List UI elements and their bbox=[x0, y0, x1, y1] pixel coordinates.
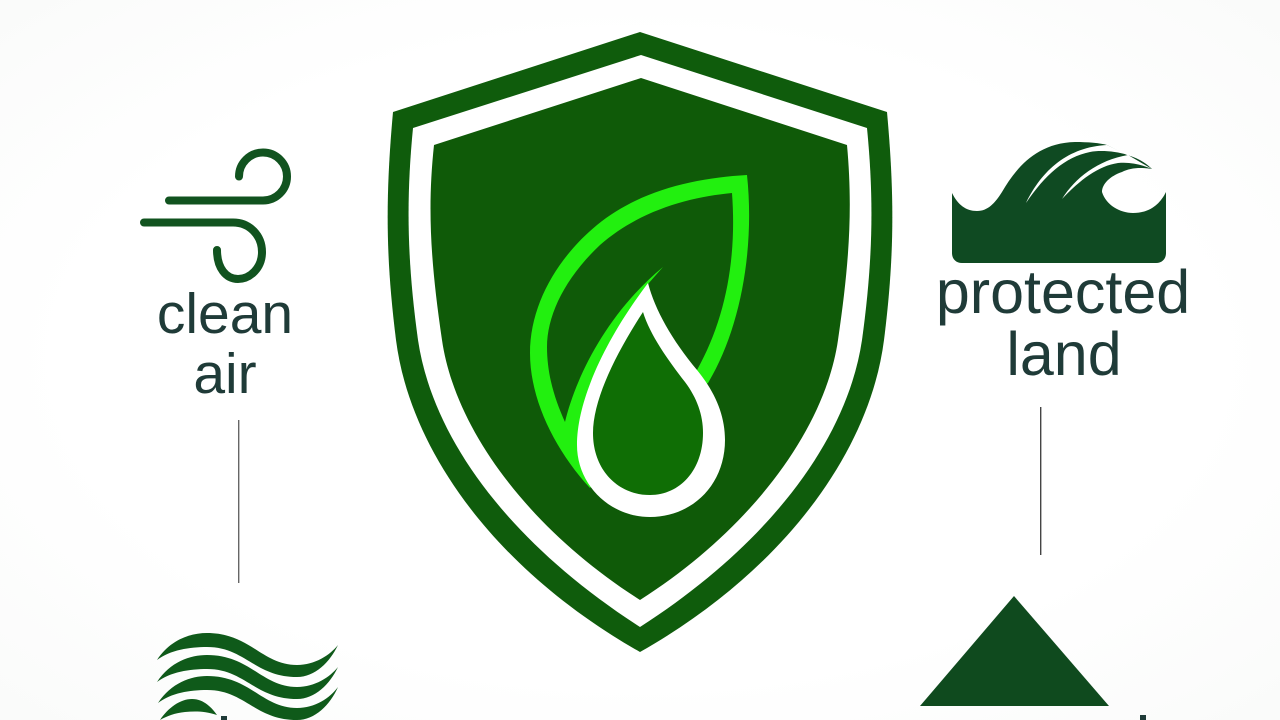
shield inner panel bbox=[431, 78, 850, 600]
label: protected land: protected bbox=[936, 258, 1190, 326]
clipped label top, left bbox=[221, 716, 227, 720]
icon: protected land wave bbox=[952, 142, 1166, 263]
wave crest highlights bbox=[1026, 145, 1152, 203]
icon: water drop bbox=[577, 283, 725, 517]
right connector line bbox=[1040, 407, 1041, 555]
shield outer band bbox=[388, 32, 892, 652]
icon: wind bbox=[144, 152, 287, 279]
icon: water waves bbox=[157, 633, 338, 720]
label: protected land: land bbox=[1006, 320, 1122, 388]
clipped label top, right bbox=[1140, 715, 1146, 720]
label: clean air: clean bbox=[157, 282, 293, 346]
label: clean air: air bbox=[193, 342, 257, 406]
central shield emblem bbox=[388, 32, 892, 652]
icon: mountain triangle bbox=[920, 596, 1109, 706]
shield white band bbox=[409, 55, 871, 627]
icon: bright green leaf bbox=[530, 175, 749, 488]
left connector line bbox=[238, 420, 239, 583]
